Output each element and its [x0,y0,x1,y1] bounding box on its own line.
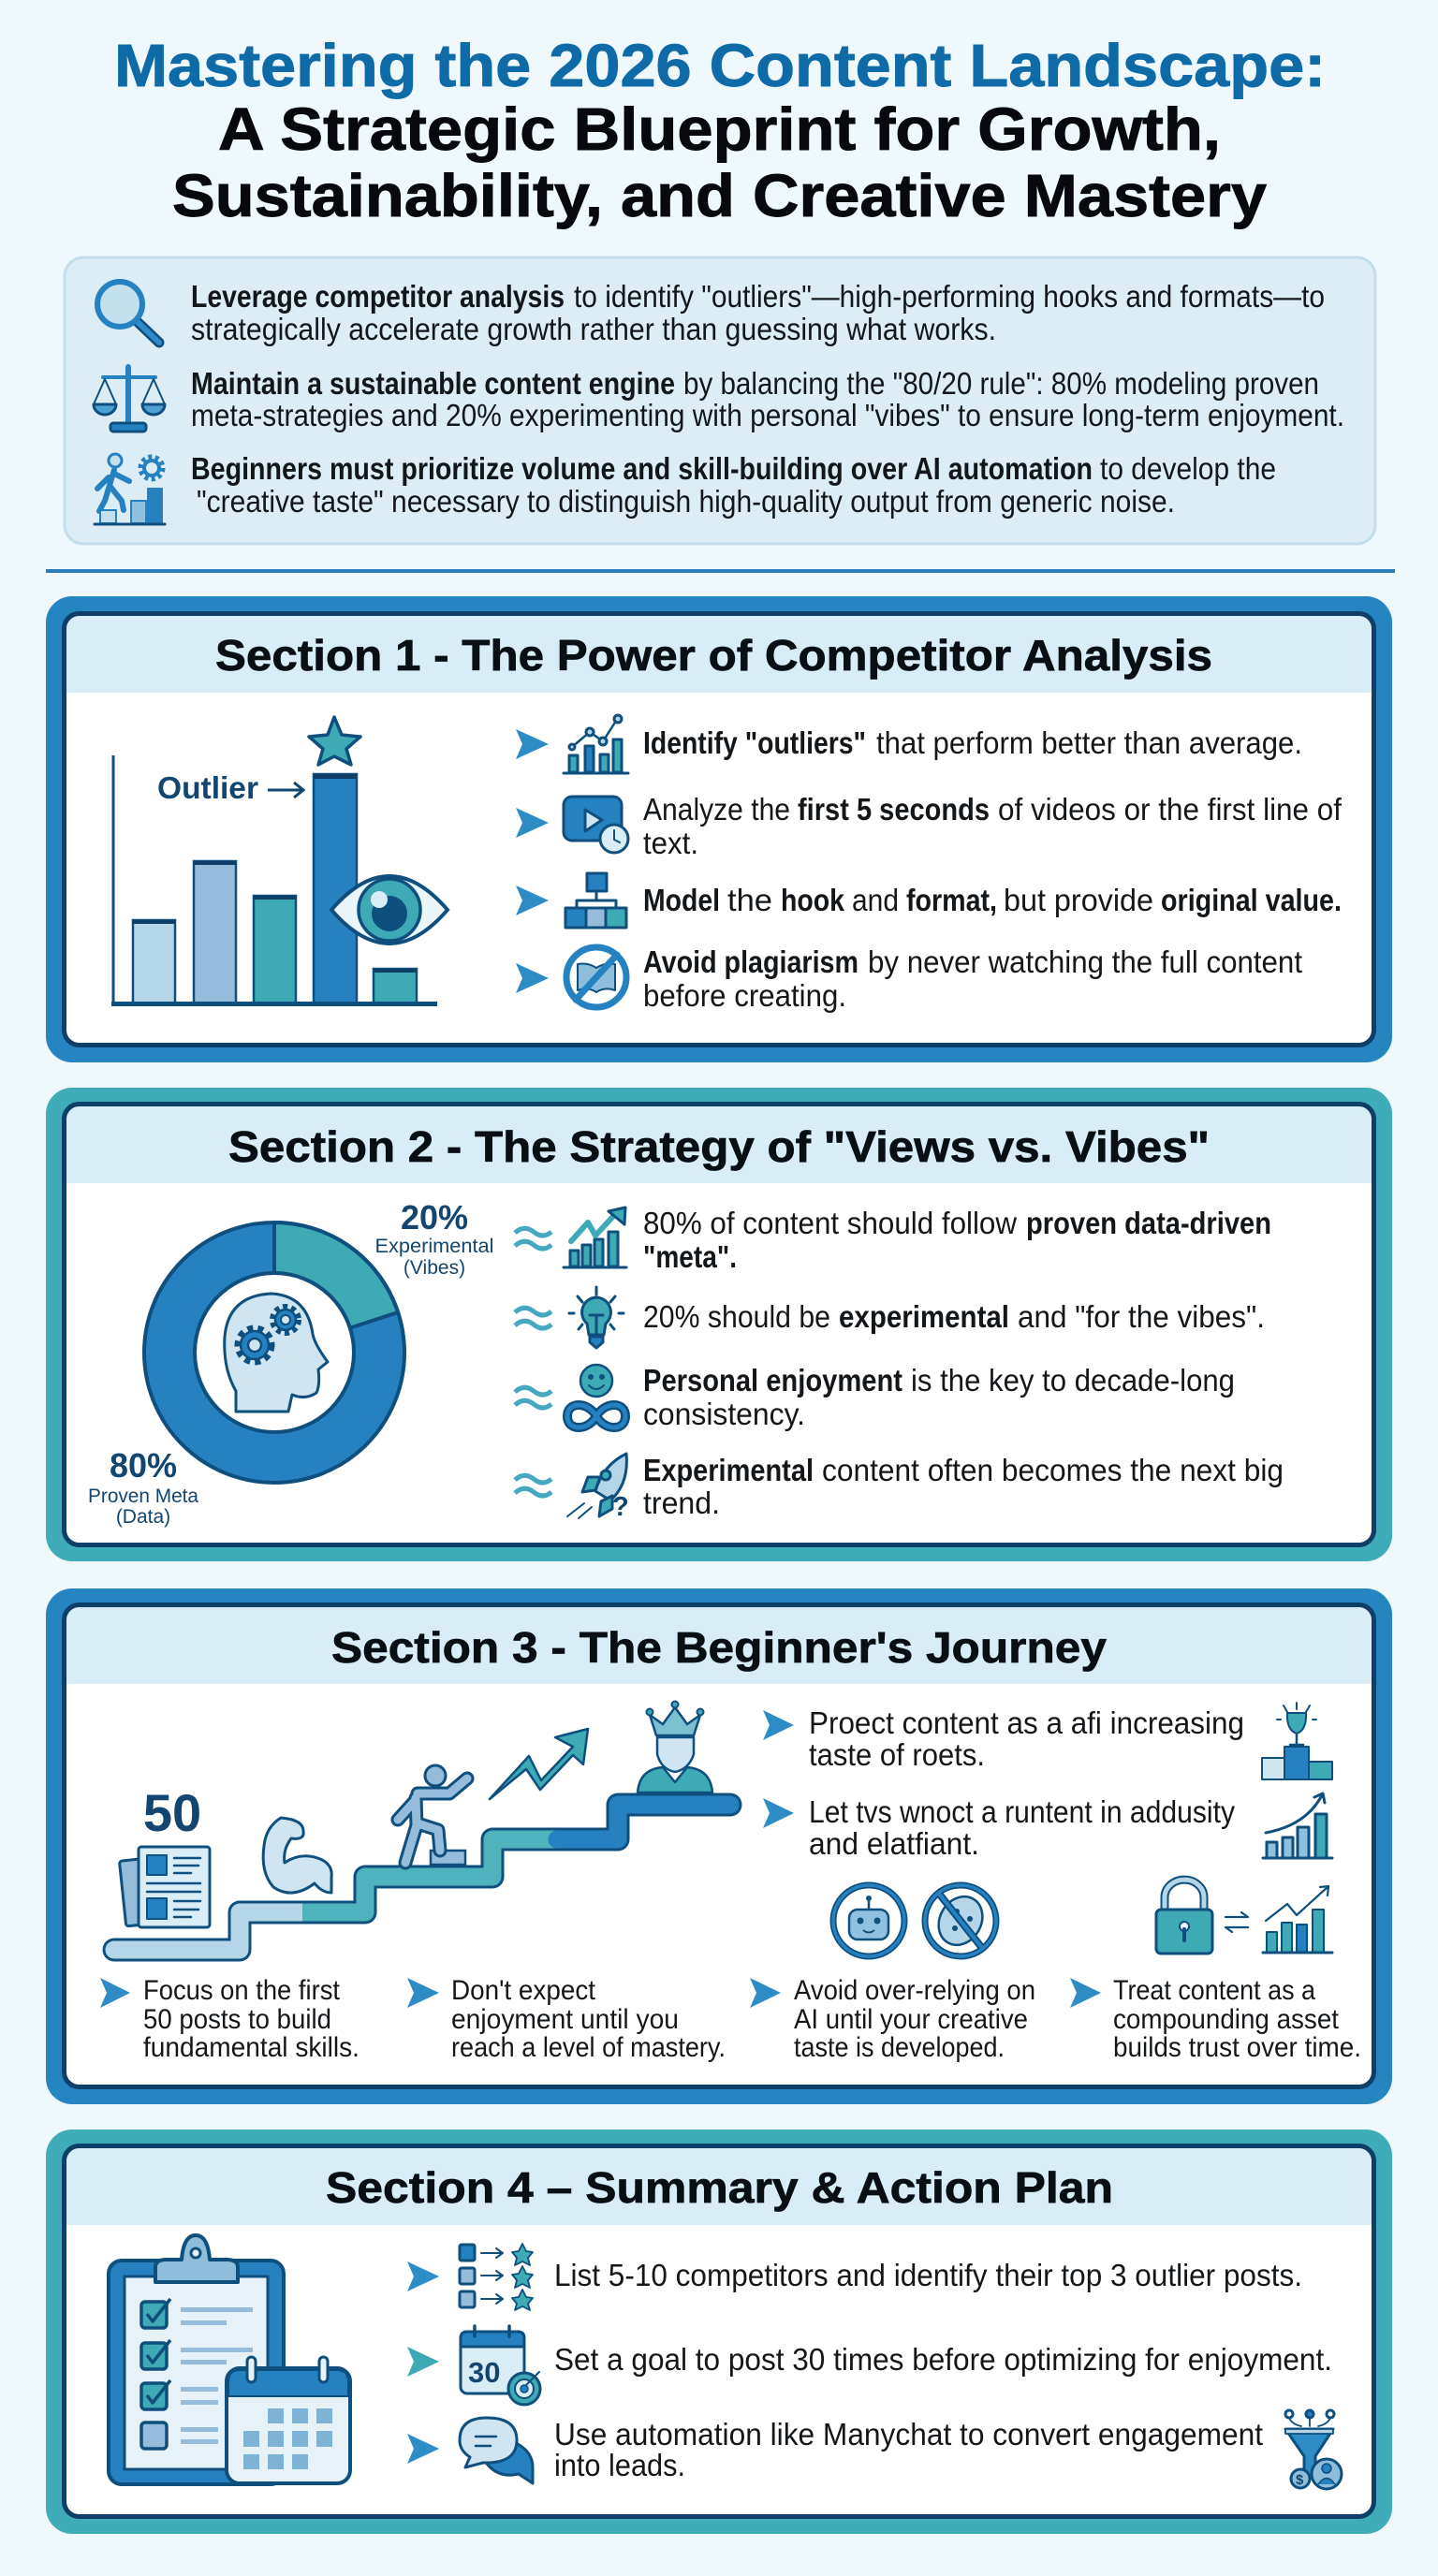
text: beginners takeaway: Beginners must prioritize volume and skill-building over AI automation [191,451,1093,486]
text: beginners takeaway: "creative taste" necessary to distinguish high-quality output from generic noise. [197,484,1175,519]
icon: growth chart [1263,1793,1332,1858]
label: outlier [157,770,303,805]
title [114,32,1326,229]
bullet: don't expect enjoyment [407,1975,726,2063]
heading: section 1: Section 1 - The Power of Competitor Analysis [215,631,1212,680]
text: don't expect enjoyment [451,1975,726,2063]
text: compounding asset: compounding asset [1113,2004,1340,2035]
icon: smiley and infinity [567,1365,625,1427]
text: competitor analysis takeaway: Leverage competitor analysis [191,279,565,314]
text: competitor analysis takeaway: to identify "outliers"—high-performing hooks and formats—to [574,279,1325,314]
icon: list to stars [460,2244,533,2310]
bullet 1: 80% data-driven meta [515,1206,1271,1274]
bullet 2: first 5 seconds [516,792,1343,860]
illustration: staircase journey [114,1702,730,1950]
text: competitor analysis takeaway [191,279,1325,346]
text: list competitors: List 5-10 competitors and identify their top 3 outlier posts. [554,2258,1302,2292]
bullet: focus on first 50 posts [100,1975,360,2063]
text: experimental trends: trend. [643,1486,720,1520]
icon: calendar [227,2357,350,2483]
label: 80% proven meta [88,1446,198,1528]
text: don't expect enjoyment: enjoyment until you [451,2004,679,2035]
icon: person climbing with gear [95,454,165,524]
text: model hook and format: Model [643,883,720,917]
icon: line and bar chart [564,715,628,773]
text: automation [554,2417,1263,2482]
icon: magnifying glass [97,282,159,343]
illustration: clipboard and calendar [109,2235,350,2484]
bullet: compounding asset [1070,1975,1361,2063]
text: first 5 seconds: text. [643,826,698,860]
label: outlier: Outlier [157,770,258,805]
title: Mastering the 2026 Content Landscape: [114,32,1326,99]
text: experimental trends [643,1453,1284,1520]
heading: section 3: Section 3 - The Beginner's Journey [331,1623,1107,1672]
icon: zigzag growth arrow [490,1729,588,1799]
text: 80% data-driven meta: proven data-driven [1026,1206,1271,1240]
text: upper right 1: taste of roets. [809,1737,985,1772]
chart: bar chart with outlier [111,717,448,1006]
label: 80% proven meta: 80% [110,1446,177,1485]
text: avoid plagiarism: before creating. [643,978,846,1013]
text: model hook and format: and [852,883,899,917]
text: beginners takeaway [191,451,1276,519]
heading: section 4: Section 4 – Summary & Action Plan [326,2163,1113,2212]
icon: lightbulb [569,1287,624,1348]
text: automation: into leads. [554,2448,685,2482]
text: upper right 1 [809,1705,1244,1772]
icon: stack of posts [119,1847,210,1927]
text: 80% data-driven meta [643,1206,1271,1274]
text: avoid over-relying on AI: Avoid over-relying on [794,1975,1035,2006]
text: avoid over-relying on AI [794,1975,1035,2063]
text: personal enjoyment: is the key to decade-long [911,1363,1235,1398]
text: first 5 seconds: first 5 seconds [798,792,990,827]
bullet: avoid over-relying on AI [750,1975,1035,2063]
text: personal enjoyment: Personal enjoyment [643,1363,902,1398]
text: post 30 times: Set a goal to post 30 times before optimizing for enjoyment. [554,2342,1332,2377]
text: competitor analysis takeaway: strategically accelerate growth rather than guessing what works. [191,312,996,346]
icon: climbing person [398,1765,467,1865]
icon: rising chart [564,1208,626,1267]
text: 80% data-driven meta: "meta". [643,1239,737,1274]
heading: section 2: Section 2 - The Strategy of "Views vs. Vibes" [228,1122,1210,1171]
text: automation: Use automation like Manychat to convert engagement [554,2417,1263,2452]
icon: flexed muscle arm [263,1818,331,1893]
icon: trophy on podium [1262,1703,1332,1779]
label: 20% experimental: Experimental [374,1236,494,1257]
icon: balance scales [94,367,165,432]
icon: no brain [925,1885,996,1956]
text: avoid plagiarism: Avoid plagiarism [643,944,858,979]
text: model hook and format [643,883,1342,917]
bullet: list competitors [407,2244,1302,2310]
title: Sustainability, and Creative Mastery [172,162,1267,229]
text: first 5 seconds: of videos or the first line of [998,792,1343,827]
icon: calendar 30 with target: 30 [468,2356,500,2389]
icon: structure chart [565,873,626,928]
text: experimental trends: content often becomes the next big [822,1453,1284,1487]
text: focus on first 50 posts: 50 posts to build [143,2004,331,2035]
bullet 3: personal enjoyment [515,1363,1235,1431]
chart: 80/20 donut [88,1198,494,1528]
bullet 1: identify outliers [516,715,1302,773]
icon: rocket with question mark [567,1454,626,1518]
panel: section 4 summary and action plan [46,2130,1392,2534]
icon: no book [566,947,626,1007]
text: 20% experimental: and "for the vibes". [1018,1299,1265,1334]
bullet: automation [407,2410,1342,2489]
text: avoid plagiarism [643,944,1302,1013]
bullet: upper right 1 [763,1703,1332,1779]
icon: calendar 30 with target [461,2326,540,2405]
text: avoid over-relying on AI: taste is developed. [794,2032,1005,2063]
text: don't expect enjoyment: reach a level of mastery. [451,2032,726,2063]
text: sustainable engine takeaway: Maintain a sustainable content engine [191,366,675,401]
panel: key takeaways [65,257,1375,544]
icon: eye [331,876,448,944]
bullet: post 30 times [407,2326,1332,2405]
text: focus on first 50 posts: Focus on the first [143,1975,341,2006]
icon: funnel with coin and person: $ [1296,2472,1304,2488]
icon: star on outlier [309,717,360,765]
label: 50 posts: 50 [143,1783,201,1842]
text: focus on first 50 posts: fundamental skills. [143,2032,360,2063]
text: personal enjoyment: consistency. [643,1397,805,1431]
text: model hook and format: original value. [1161,883,1342,917]
text: 80% data-driven meta: 80% of content should follow [643,1206,1017,1240]
icon: padlock with chart [1156,1880,1332,1954]
panel: section 2 views vs vibes [46,1088,1392,1561]
label: 80% proven meta: Proven Meta [88,1486,198,1507]
text: upper right 2: and elatfiant. [809,1826,979,1861]
text: identify outliers [643,725,1302,760]
text: model hook and format: but provide [1004,883,1153,917]
text: sustainable engine takeaway [191,366,1344,432]
panel: section 1 competitor analysis [46,596,1392,1062]
text: don't expect enjoyment: Don't expect [451,1975,596,2006]
bullet: upper right 2 [763,1793,1332,1861]
text: personal enjoyment [643,1363,1235,1431]
bullet 2: 20% experimental [515,1287,1265,1348]
text: avoid plagiarism: by never watching the full content [868,944,1302,979]
panel: section 3 beginner's journey [46,1588,1392,2104]
text: sustainable engine takeaway: meta-strategies and 20% experimenting with personal "vibes" to ensure long-term enjoyment. [191,398,1344,432]
text: experimental trends: Experimental [643,1453,814,1487]
text: model hook and format: hook [781,883,845,917]
icon: crowned person [638,1702,712,1793]
icon: chat bubbles [460,2418,533,2483]
text: first 5 seconds [643,792,1343,860]
text: sustainable engine takeaway: by balancing the "80/20 rule": 80% modeling proven [683,366,1319,401]
icon: head with gears [225,1294,328,1412]
label: 80% proven meta: (Data) [116,1506,170,1528]
text: 20% experimental: experimental [839,1299,1009,1334]
label: 20% experimental: (Vibes) [404,1257,465,1279]
text: upper right 2: Let tvs wnoct a runtent in addusity [809,1794,1235,1829]
icon: question mark: ? [612,1492,629,1522]
label: 20% experimental: 20% [401,1198,468,1237]
bullet 4: avoid plagiarism [516,944,1302,1013]
text: upper right 1: Proect content as a afi increasing [809,1705,1244,1740]
text: beginners takeaway: to develop the [1100,451,1276,486]
text: 20% experimental [643,1299,1265,1334]
bullet 3: model hook and format [516,873,1342,928]
text: identify outliers: Identify "outliers" [643,725,866,760]
icon: video with clock [564,797,628,853]
icon: robot in circle [833,1885,904,1956]
text: compounding asset: builds trust over time. [1113,2032,1361,2063]
text: focus on first 50 posts [143,1975,360,2063]
text: avoid over-relying on AI: AI until your creative [794,2004,1028,2035]
text: first 5 seconds: Analyze the [643,792,790,827]
icon: funnel with coin and person [1285,2410,1342,2489]
text: model hook and format: format, [906,883,997,917]
label: 20% experimental [374,1198,494,1279]
text: model hook and format: the [727,883,772,917]
text: compounding asset [1113,1975,1361,2063]
text: 20% experimental: 20% should be [643,1299,830,1334]
bullet 4: experimental trends [515,1453,1284,1522]
text: compounding asset: Treat content as a [1113,1975,1315,2006]
text: upper right 2 [809,1794,1235,1861]
text: identify outliers: that perform better than average. [876,725,1302,760]
title: A Strategic Blueprint for Growth, [218,95,1221,163]
